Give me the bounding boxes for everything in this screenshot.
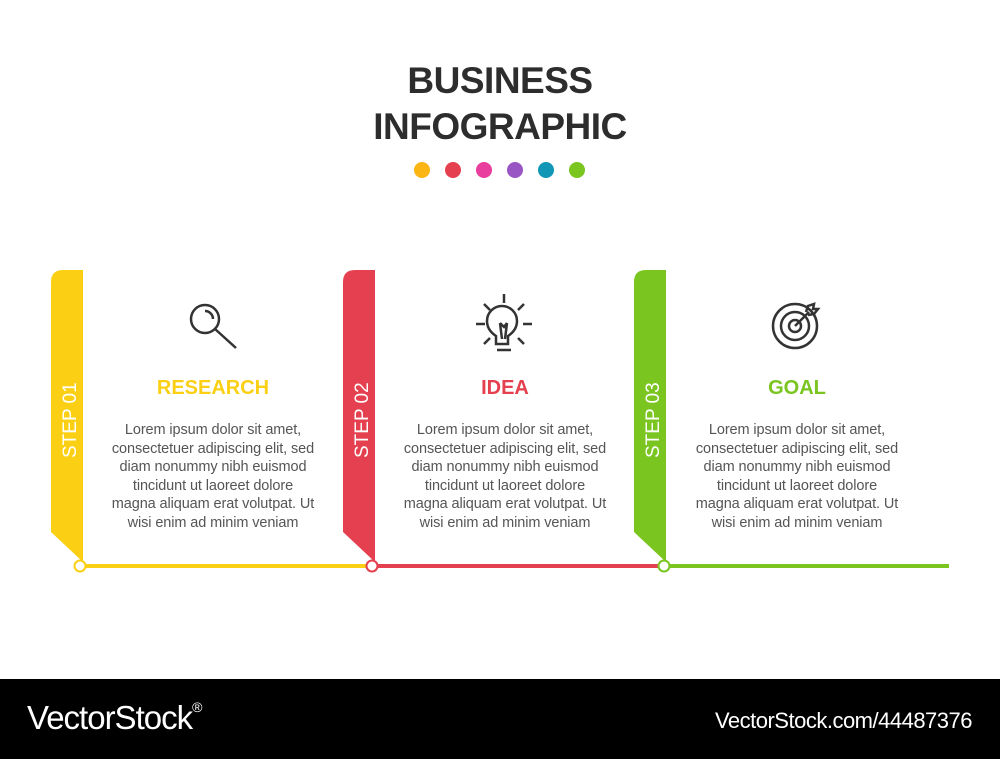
panel: research [112, 377, 314, 530]
tab: step 03 [634, 270, 670, 572]
panel: idea: Lorem ipsum dolor sit amet, [417, 422, 593, 438]
panel: research: wisi enim ad minim veniam [128, 514, 298, 530]
tab: step 03: STEP 03 [643, 382, 664, 458]
panel: research: consectetuer adipiscing elit, sed [112, 440, 314, 456]
panel: research: tincidunt ut laoreet dolore [133, 478, 293, 494]
panel: idea: diam nonummy nibh euismod [412, 459, 598, 475]
panel: idea: tincidunt ut laoreet dolore [425, 478, 585, 494]
tab: step 01: STEP 01 [60, 382, 81, 458]
panel: goal: GOAL [768, 377, 826, 399]
color dots [414, 162, 585, 178]
footer logo: VectorStock® [27, 699, 201, 736]
footer id: VectorStock.com/44487376 [715, 708, 972, 733]
tab: step 01 [51, 270, 86, 572]
timeline lines [80, 564, 949, 568]
panel: goal [696, 377, 898, 530]
panel: idea: IDEA [481, 377, 529, 399]
panel: idea: magna aliquam erat volutpat. Ut [404, 496, 606, 512]
title: INFOGRAPHIC [373, 106, 627, 147]
panel: research: Lorem ipsum dolor sit amet, [125, 422, 301, 438]
panel: goal: magna aliquam erat volutpat. Ut [696, 496, 898, 512]
panel: goal: Lorem ipsum dolor sit amet, [709, 422, 885, 438]
panel: goal: wisi enim ad minim veniam [712, 514, 882, 530]
footer band [0, 679, 1000, 759]
panel: research: magna aliquam erat volutpat. Ut [112, 496, 314, 512]
icon: target [773, 304, 818, 348]
panel: goal: consectetuer adipiscing elit, sed [696, 440, 898, 456]
panel: goal: tincidunt ut laoreet dolore [717, 478, 877, 494]
title [373, 60, 627, 147]
tab: step 02 [343, 270, 378, 572]
title: BUSINESS [407, 60, 593, 101]
tab: step 02: STEP 02 [352, 382, 373, 458]
icon: lightbulb [476, 294, 532, 350]
panel: idea: consectetuer adipiscing elit, sed [404, 440, 606, 456]
panel: goal: diam nonummy nibh euismod [704, 459, 890, 475]
panel: idea [404, 377, 606, 530]
icon: magnifier [191, 305, 236, 348]
panel: research: diam nonummy nibh euismod [120, 459, 306, 475]
panel: idea: wisi enim ad minim veniam [420, 514, 590, 530]
panel: research: RESEARCH [157, 377, 269, 399]
